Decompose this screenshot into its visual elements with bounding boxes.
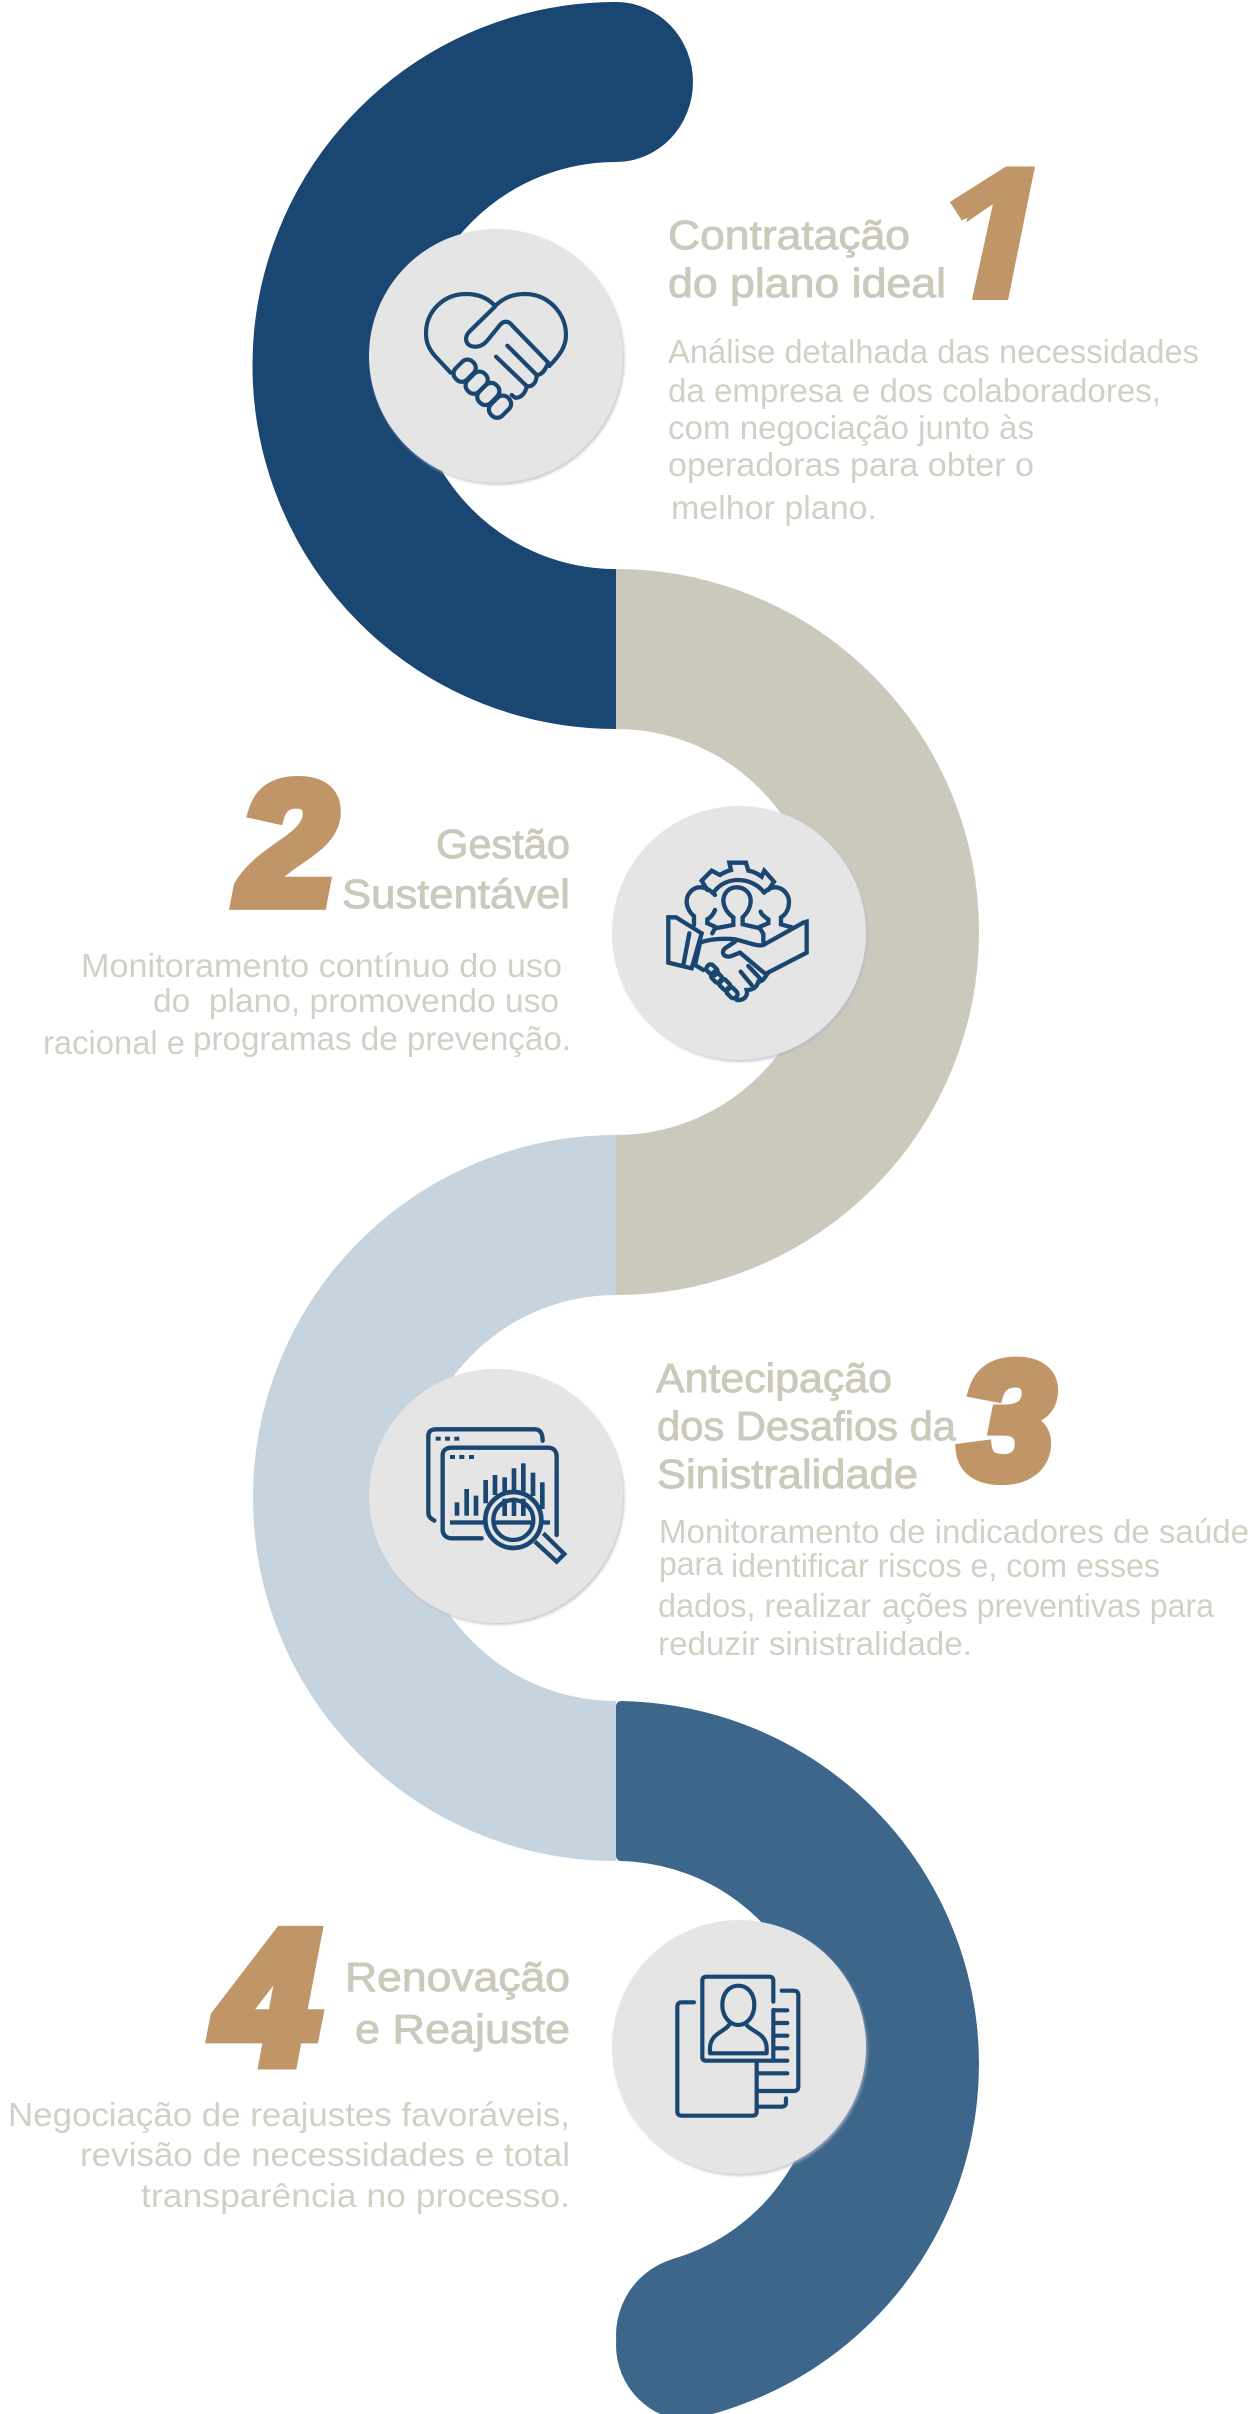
icon: profile documents xyxy=(677,1977,798,2116)
number 2: 2 xyxy=(237,748,336,940)
heading 4: e Reajuste xyxy=(355,2006,570,2052)
number 1: 1 xyxy=(922,127,1050,340)
panel: step 2 xyxy=(43,748,866,1061)
panel: step 1 xyxy=(369,127,1199,526)
number 4: 4 xyxy=(213,1894,319,2102)
icon circle 1 xyxy=(369,229,623,483)
description 2 xyxy=(43,947,571,1061)
icon circle 4 xyxy=(612,1920,866,2174)
heading 1: do plano ideal xyxy=(668,260,946,306)
icon: heart handshake xyxy=(426,294,566,421)
ribbon: beige segment xyxy=(616,649,899,1215)
heading 1: Contratação xyxy=(668,212,910,258)
description 3: dados, realizar xyxy=(658,1587,871,1624)
panel: step 4 xyxy=(8,1894,866,2214)
heading 3: Antecipação xyxy=(656,1355,892,1401)
description 2: do plano, promovendo uso xyxy=(153,982,559,1019)
description 3: reduzir sinistralidade. xyxy=(658,1625,972,1662)
icon: analytics windows with magnifier xyxy=(428,1429,564,1562)
description 3: identificar riscos e, com esses xyxy=(731,1547,1160,1584)
heading 3: dos Desafios da xyxy=(657,1403,956,1449)
description 2: programas de prevenção. xyxy=(193,1020,571,1057)
description 1 xyxy=(668,333,1199,526)
description 4: transparência no processo. xyxy=(141,2177,570,2214)
heading 3: Sinistralidade xyxy=(657,1451,918,1497)
description 3: ações preventivas para xyxy=(882,1587,1215,1624)
description 1: Análise detalhada das necessidades xyxy=(668,333,1199,370)
description 1: melhor plano. xyxy=(671,489,877,526)
heading 4 xyxy=(345,1954,570,2052)
icon: team gear handshake xyxy=(668,863,807,1000)
heading 2: Sustentável xyxy=(342,871,570,917)
ribbon: steel blue segment xyxy=(616,1701,899,2414)
description 4 xyxy=(8,2096,570,2214)
description 4: Negociação de reajustes favoráveis, xyxy=(8,2096,570,2133)
ribbon: light blue segment xyxy=(333,1215,616,1781)
number 3: 3 xyxy=(961,1329,1053,1512)
heading 2: Gestão xyxy=(436,821,570,867)
description 2: racional e xyxy=(43,1024,185,1061)
heading 2 xyxy=(342,821,570,917)
description 3: para xyxy=(659,1545,724,1582)
heading 3 xyxy=(656,1355,956,1497)
description 4: revisão de necessidades e total xyxy=(80,2136,570,2173)
icon circle 2 xyxy=(612,806,866,1060)
icon circle 3 xyxy=(369,1369,623,1623)
description 1: da empresa e dos colaboradores, xyxy=(668,372,1161,409)
description 3: Monitoramento de indicadores de saúde xyxy=(659,1513,1249,1550)
description 3 xyxy=(658,1513,1249,1662)
description 1: operadoras para obter o xyxy=(668,446,1034,483)
description 1: com negociação junto às xyxy=(668,409,1034,446)
heading 1 xyxy=(668,212,946,306)
description 2: Monitoramento contínuo do uso xyxy=(81,947,562,984)
ribbon: navy segment xyxy=(332,2,693,649)
panel: step 3 xyxy=(369,1329,1249,1662)
heading 4: Renovação xyxy=(345,1954,570,2000)
